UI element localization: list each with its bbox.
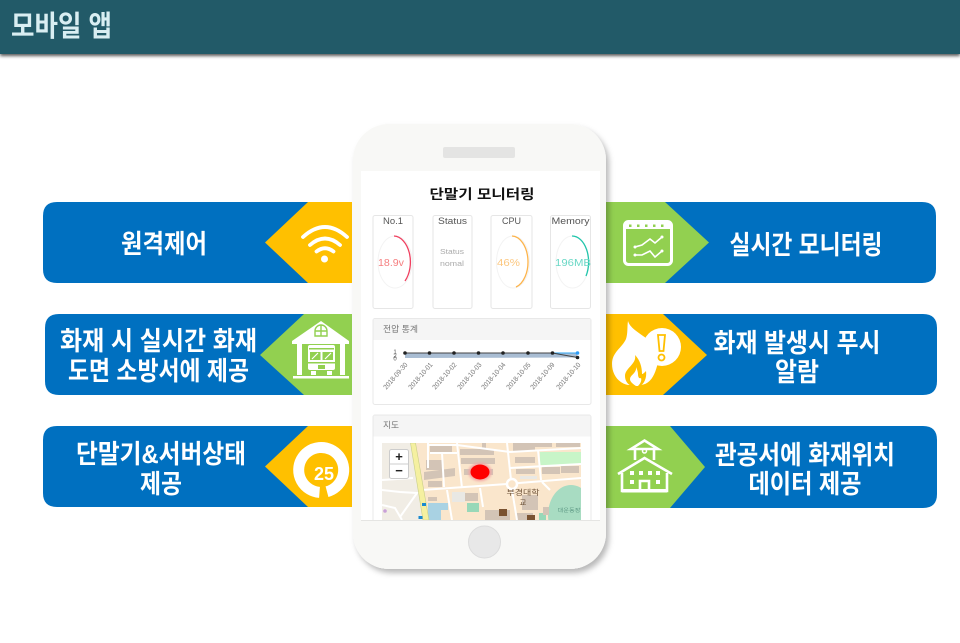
label lines <box>60 326 257 386</box>
card: CPU <box>491 216 532 308</box>
home button <box>468 526 500 558</box>
label lines: 단말기&서버상태 <box>76 439 246 469</box>
date axis labels: 2018-10-09 <box>530 362 557 391</box>
icon: fire station <box>292 321 349 378</box>
line chart: 2 <box>393 354 397 360</box>
speaker <box>443 147 515 158</box>
icon: flame alert <box>612 321 681 386</box>
label lines: 데이터 제공 <box>748 469 862 499</box>
map zoom control: − <box>395 463 403 478</box>
band: 화재 시 실시간 화재 도면 소방서에 제공 <box>45 314 352 395</box>
band: 단말기&서버상태 제공 <box>43 426 352 507</box>
map <box>382 443 581 520</box>
icon: gauge 25 <box>299 447 344 492</box>
card: Status <box>433 216 472 308</box>
card: No.1: No.1 <box>383 216 403 226</box>
icon: chart window <box>624 222 672 264</box>
label lines <box>714 328 880 387</box>
chin panel <box>353 520 606 569</box>
band: 실시간 모니터링 <box>600 202 936 283</box>
date axis labels: 2018-10-02 <box>432 362 459 391</box>
band: 관공서에 화재위치 데이터 제공 <box>600 426 937 508</box>
screen title: 단말기 모니터링 <box>430 187 534 202</box>
label lines: 제공 <box>140 469 182 499</box>
card: Status: Status <box>438 216 468 226</box>
label: 원격제어: 원격제어 <box>121 229 207 259</box>
line chart: 1 <box>393 350 397 356</box>
marker: red location <box>470 464 490 480</box>
card: Status: Status <box>440 247 464 256</box>
screen <box>361 171 600 545</box>
card: CPU: CPU <box>502 216 521 226</box>
date axis labels: 2018-10-04 <box>481 362 508 391</box>
card: CPU: 46% <box>497 257 520 269</box>
label lines <box>76 439 246 499</box>
card: Memory: 196MB <box>555 257 591 269</box>
card: No.1: 18.9v <box>378 257 405 269</box>
date axis labels: 2018-10-01 <box>408 362 435 391</box>
date axis labels <box>383 362 583 391</box>
band: 화재 발생시 푸시 알람 <box>600 314 937 395</box>
icon: gauge 25: 25 <box>314 464 334 484</box>
date axis labels: 2018-10-03 <box>457 362 484 391</box>
line chart <box>383 350 583 391</box>
map zoom control <box>390 449 408 478</box>
date axis labels: 2018-10-05 <box>506 362 533 391</box>
panel: 전압 통계: 전압 통계 <box>383 324 418 334</box>
label lines <box>715 440 895 499</box>
card: Memory: Memory <box>552 216 590 226</box>
phone body <box>353 124 606 569</box>
label: 실시간 모니터링 <box>730 230 882 260</box>
map: 대운동장 <box>558 507 581 514</box>
band: 원격제어 <box>43 202 352 283</box>
icon: wifi <box>303 227 347 262</box>
map: 부경대학 <box>506 487 540 497</box>
panel: 전압 통계 <box>373 318 591 404</box>
phone <box>353 124 606 569</box>
map: 교 <box>520 498 527 507</box>
label lines: 알람 <box>775 357 819 387</box>
card: Memory <box>550 216 591 308</box>
panel: 지도 <box>372 414 592 520</box>
title: 모바일 앱 <box>11 10 112 43</box>
card: Status: nomal <box>440 259 464 268</box>
icon: school building <box>618 440 672 492</box>
map zoom control: + <box>395 449 403 464</box>
panel: 지도: 지도 <box>383 420 399 430</box>
date axis labels: 2018-10-10 <box>556 362 583 391</box>
label lines: 화재 발생시 푸시 <box>714 328 880 358</box>
line chart: 0 <box>393 356 397 362</box>
label lines: 도면 소방서에 제공 <box>68 356 249 386</box>
label lines: 관공서에 화재위치 <box>715 440 895 470</box>
card: No.1 <box>373 216 413 308</box>
date axis labels: 2018-09-30 <box>383 362 410 391</box>
label lines: 화재 시 실시간 화재 <box>60 326 257 356</box>
header bar <box>0 0 960 54</box>
